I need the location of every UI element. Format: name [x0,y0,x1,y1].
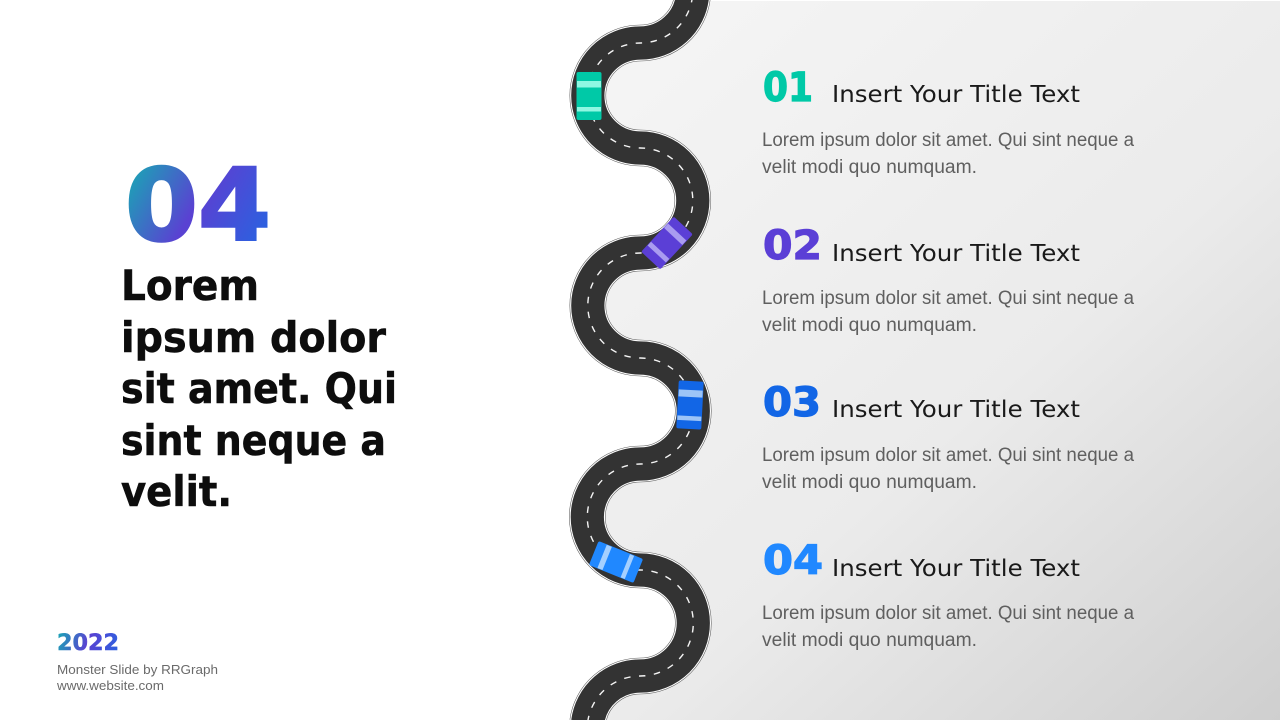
number 02: 02 [763,223,822,269]
body 02: velit modi quo numquam. [762,315,977,336]
main heading: velit. [121,467,232,516]
item 01 [762,65,1134,178]
body 03: velit modi quo numquam. [762,472,977,493]
main heading: ipsum dolor [121,313,386,362]
body 03 [762,445,1134,493]
body 02: Lorem ipsum dolor sit amet. Qui sint neque a [762,288,1134,309]
body 01: Lorem ipsum dolor sit amet. Qui sint neque a [762,130,1134,151]
body 04: Lorem ipsum dolor sit amet. Qui sint neque a [762,603,1134,624]
item 04 [762,538,1134,651]
body 03: Lorem ipsum dolor sit amet. Qui sint neque a [762,445,1134,466]
body 01: velit modi quo numquam. [762,157,977,178]
icon: purple car [641,217,693,269]
title 03: Insert Your Title Text [832,397,1080,423]
winding road [587,0,693,720]
body 04 [762,603,1134,651]
footer credits: Monster Slide by RRGraph [57,662,218,677]
body 02 [762,288,1134,336]
footer year: 2022 [57,631,119,656]
item 02 [762,223,1134,336]
icon: blue car [676,380,704,430]
icon: teal car [576,72,602,120]
title 04: Insert Your Title Text [832,556,1080,582]
icon: light blue car [589,541,643,583]
title 01: Insert Your Title Text [832,82,1080,108]
footer credits: www.website.com [56,678,164,693]
number 01: 01 [763,65,813,111]
number 04: 04 [763,538,823,584]
grey background panel right of the road [587,1,1280,720]
body 01 [762,130,1134,178]
number 03: 03 [763,380,821,426]
body 04: velit modi quo numquam. [762,630,977,651]
big number: 04 [125,147,271,264]
main heading: Lorem [121,261,259,310]
footer credits [56,662,218,693]
item 03 [762,380,1134,493]
title 02: Insert Your Title Text [832,241,1080,267]
main heading: sit amet. Qui [121,364,397,413]
main heading [121,261,397,516]
main heading: sint neque a [121,416,386,465]
